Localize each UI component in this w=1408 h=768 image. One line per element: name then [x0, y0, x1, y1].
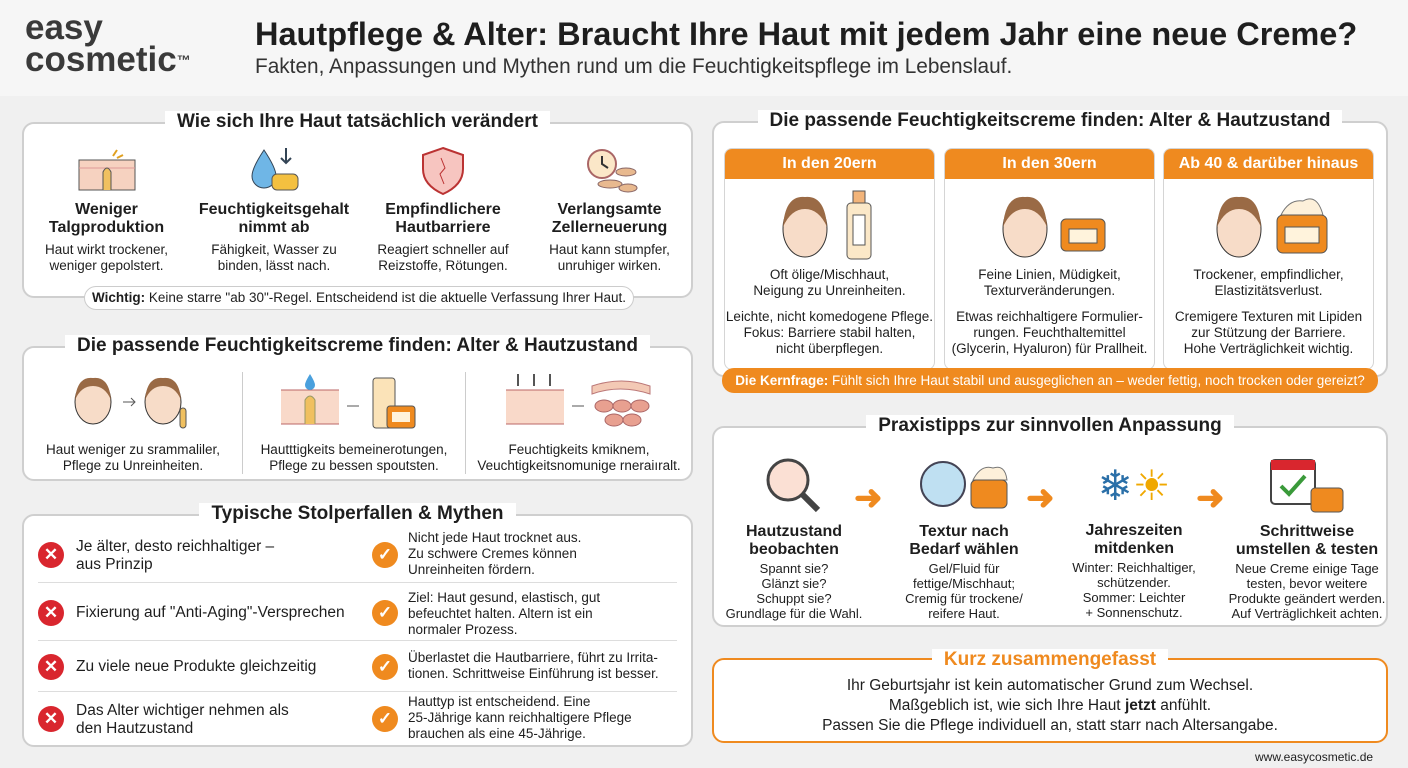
card: 40+: Trockener, empfindlicher,: [1193, 267, 1344, 282]
subtitle: Fakten, Anpassungen und Mythen rund um die Feuchtigkeitspflege im Lebenslauf.: [255, 55, 1012, 78]
logo: [25, 8, 191, 79]
column: Barriere: Reizstoffe, Rötungen.: [378, 258, 508, 273]
tip 4: Auf Verträglichkeit achten.: [1231, 606, 1383, 621]
text: Wie sich Ihre Haut tatsächlich verändert: [177, 111, 538, 132]
column: Barriere: [377, 147, 509, 273]
card: 30s: [944, 148, 1155, 370]
icon: shield: [422, 147, 464, 196]
icon: snow sun: ❄☀: [1098, 462, 1170, 509]
title: Hautpflege & Alter: Braucht Ihre Haut mit jedem Jahr eine neue Creme?: [255, 16, 1357, 52]
tip 2: Cremig für trockene/: [905, 591, 1023, 606]
column: Talg: Talgproduktion: [49, 219, 164, 236]
icon: drop sponge: [252, 148, 298, 190]
column: Talg: [45, 150, 168, 273]
card: 30s: rungen. Feuchthaltemittel: [973, 325, 1126, 340]
tip 3: Jahreszeiten: [1086, 522, 1182, 539]
note: wichtig: [84, 286, 634, 310]
card: 40+: zur Stützung der Barriere.: [1191, 325, 1346, 340]
tip 4: umstellen & testen: [1236, 541, 1378, 558]
column: Talg: Weniger: [75, 201, 138, 218]
icon: skin layers: [506, 374, 650, 426]
tip 2: Textur nach: [919, 523, 1009, 540]
item 1: Haut weniger zu srammaliler,: [46, 442, 220, 457]
card: 30s: Etwas reichhaltigere Formulier-: [956, 309, 1143, 324]
column: Feuchtigkeit: Fähigkeit, Wasser zu: [211, 242, 337, 257]
tip 4: Schrittweise: [1260, 523, 1354, 540]
card: 30s: In den 30ern: [1002, 155, 1097, 172]
card: 20s: Leichte, nicht komedogene Pflege.: [726, 309, 933, 324]
tip 3: + Sonnenschutz.: [1085, 605, 1183, 620]
logo: easy: [25, 8, 103, 47]
panel: right age cards: [712, 121, 1388, 377]
card: 30s: (Glycerin, Hyaluron) für Prallheit.: [952, 341, 1147, 356]
row 4: brauchen als eine 45-Jährige.: [408, 726, 586, 741]
row 2: ✓: [378, 603, 392, 622]
text: Die passende Feuchtigkeitscreme finden: Alter & Hautzustand: [77, 335, 638, 356]
icon: texture: [920, 461, 1008, 508]
text: Typische Stolperfallen & Mythen: [211, 503, 504, 524]
item 1: [46, 378, 220, 473]
tip 3: [1072, 462, 1196, 620]
row 3: Zu viele neue Produkte gleichzeitig: [76, 658, 316, 675]
column: Talg: weniger gepolstert.: [49, 258, 164, 273]
card: 20s: Oft ölige/Mischhaut,: [770, 267, 889, 282]
row 1: aus Prinzip: [76, 556, 153, 573]
item 2: Hautttigkeits bemeinerotungen,: [261, 442, 447, 457]
row 1: Zu schwere Cremes können: [408, 546, 577, 561]
tip 3: schützender.: [1097, 575, 1171, 590]
item 2: [242, 372, 466, 474]
row 4: 25-Jährige kann reichhaltigere Pflege: [408, 710, 632, 725]
column: Barriere: Reagiert schneller auf: [377, 242, 509, 257]
row 4: Das Alter wichtiger nehmen als: [76, 702, 289, 719]
row 4: den Hautzustand: [76, 720, 193, 737]
tip 2: Gel/Fluid für: [929, 561, 999, 576]
tip 2: Bedarf wählen: [909, 541, 1019, 558]
card: 40+: [1163, 148, 1374, 370]
panel: summary: Ihr Geburtsjahr ist kein automatischer Grund zum Wechsel.: [847, 677, 1253, 694]
arrow: ➜: [1196, 479, 1224, 517]
tip 3: Winter: Reichhaltiger,: [1072, 560, 1196, 575]
tip 4: [1229, 459, 1385, 621]
card: 30s: Feine Linien, Müdigkeit,: [978, 267, 1121, 282]
arrow: ➜: [854, 479, 882, 517]
tip 1: Grundlage für die Wahl.: [726, 606, 862, 621]
card: 40+: Cremigere Texturen mit Lipiden: [1175, 309, 1362, 324]
row 1: ✕: [44, 545, 58, 564]
callout: Kernfrage: [722, 368, 1378, 393]
panel: practical tips: [712, 426, 1388, 627]
card: 20s: Fokus: Barriere stabil halten,: [744, 325, 915, 340]
panel: left cream finder: [22, 346, 693, 481]
tip 2: [905, 461, 1023, 621]
row 2: ✕: [44, 603, 58, 622]
card: 20s: nicht überpflegen.: [776, 341, 883, 356]
column: Zellerneuerung: Zellerneuerung: [552, 219, 667, 236]
row 2: befeuchtet halten. Altern ist ein: [408, 606, 593, 621]
tip 1: [726, 458, 862, 621]
column: Barriere: Hautbarriere: [395, 219, 491, 236]
row 3: tionen. Schrittweise Einführung ist besser.: [408, 666, 659, 681]
item 2: Pflege zu bessen spoutsten.: [269, 458, 439, 473]
tip 4: Neue Creme einige Tage: [1235, 561, 1379, 576]
row 4: ✓: [378, 709, 392, 728]
panel: summary: Passen Sie die Pflege individuell an, statt starr nach Altersangabe.: [822, 717, 1278, 734]
tip 1: Hautzustand: [746, 523, 842, 540]
row 4: ✕: [44, 709, 58, 728]
row 2: [38, 586, 677, 641]
column: Zellerneuerung: [549, 149, 670, 273]
footer url: www.easycosmetic.de: [1255, 750, 1373, 764]
row 3: ✕: [44, 657, 58, 676]
row 2: Fixierung auf "Anti-Aging"-Versprechen: [76, 604, 345, 621]
panel: summary: Maßgeblich ist, wie sich Ihre Haut jetzt anfühlt.: [889, 697, 1211, 714]
icon: magnifier: [766, 458, 820, 512]
icon: face & bottle: [782, 190, 872, 260]
tip 1: Schuppt sie?: [756, 591, 832, 606]
tip 3: Sommer: Leichter: [1083, 590, 1185, 605]
tip 1: Glänzt sie?: [761, 576, 827, 591]
row 3: ✓: [378, 657, 392, 676]
row 1: Nicht jede Haut trocknet aus.: [408, 530, 581, 545]
column: Barriere: Empfindlichere: [385, 201, 501, 218]
row 1: [38, 528, 677, 583]
tip 1: Spannt sie?: [760, 561, 828, 576]
row 1: Unreinheiten fördern.: [408, 562, 535, 577]
card: 20s: [724, 148, 935, 370]
panel: skin changes: [22, 122, 693, 298]
icon: skin to cream: [281, 374, 416, 428]
column: Feuchtigkeit: [199, 148, 349, 273]
tip 2: reifere Haut.: [928, 606, 1000, 621]
row 4: [38, 694, 632, 741]
row 2: Ziel: Haut gesund, elastisch, gut: [408, 590, 600, 605]
header band: [0, 0, 1408, 96]
callout: Kernfrage: Die Kernfrage: Fühlt sich Ihre Haut stabil und ausgeglichen an – weder fettig, noch trocken oder gereizt?: [735, 373, 1365, 388]
card: 40+: Ab 40 & darüber hinaus: [1179, 155, 1358, 172]
column: Zellerneuerung: Verlangsamte: [557, 201, 662, 218]
tip 1: beobachten: [749, 541, 839, 558]
icon: face & jar: [1002, 196, 1106, 258]
card: 20s: In den 20ern: [782, 155, 877, 172]
icon: clock: [587, 149, 638, 192]
row 3: [38, 642, 677, 692]
card: 30s: Texturveränderungen.: [984, 283, 1115, 298]
row 3: Überlastet die Hautbarriere, führt zu Irrita-: [408, 650, 658, 665]
panel: summary: [712, 658, 1388, 743]
item 3: [477, 374, 681, 473]
column: Feuchtigkeit: nimmt ab: [238, 219, 310, 236]
item 1: Pflege zu Unreinheiten.: [63, 458, 203, 473]
card: 40+: Hohe Verträglichkeit wichtig.: [1184, 341, 1353, 356]
card: 20s: Neigung zu Unreinheiten.: [753, 283, 906, 298]
column: Zellerneuerung: unruhiger wirken.: [558, 258, 661, 273]
row 2: normaler Prozess.: [408, 622, 518, 637]
icon: faces: [74, 378, 186, 428]
arrow: ➜: [1026, 479, 1054, 517]
row 1: ✓: [378, 545, 392, 564]
panel: summary: Kurz zusammengefasst: [944, 649, 1156, 670]
icon: skin layer: [78, 150, 136, 190]
panel: myths: [22, 514, 693, 747]
column: Zellerneuerung: Haut kann stumpfer,: [549, 242, 670, 257]
text: Die passende Feuchtigkeitscreme finden: Alter & Hautzustand: [770, 110, 1330, 131]
card: 40+: Elastizitätsverlust.: [1214, 283, 1323, 298]
item 3: Feuchtigkeits kmiknem,: [508, 442, 650, 457]
row 4: Hauttyp ist entscheidend. Eine: [408, 694, 590, 709]
text: Praxistipps zur sinnvollen Anpassung: [878, 415, 1222, 436]
tip 4: testen, bevor weitere: [1247, 576, 1367, 591]
tip 4: Produkte geändert werden.: [1229, 591, 1385, 606]
note: wichtig: Wichtig: Keine starre "ab 30"-Regel. Entscheidend ist die aktuelle Verfassung Ihrer Haut.: [92, 290, 626, 305]
icon: face & cream: [1216, 196, 1328, 258]
icon: calendar: [1270, 459, 1344, 512]
column: Feuchtigkeit: binden, lässt nach.: [218, 258, 330, 273]
column: Feuchtigkeit: Feuchtigkeitsgehalt: [199, 201, 349, 218]
item 3: Veuchtigkeitsnomunige rneraiıralt.: [477, 458, 681, 473]
tip 2: fettige/Mischhaut;: [913, 576, 1015, 591]
tip 3: mitdenken: [1094, 540, 1174, 557]
column: Talg: Haut wirkt trockener,: [45, 242, 168, 257]
logo: cosmetic™: [25, 40, 191, 79]
row 1: Je älter, desto reichhaltiger –: [76, 538, 274, 555]
